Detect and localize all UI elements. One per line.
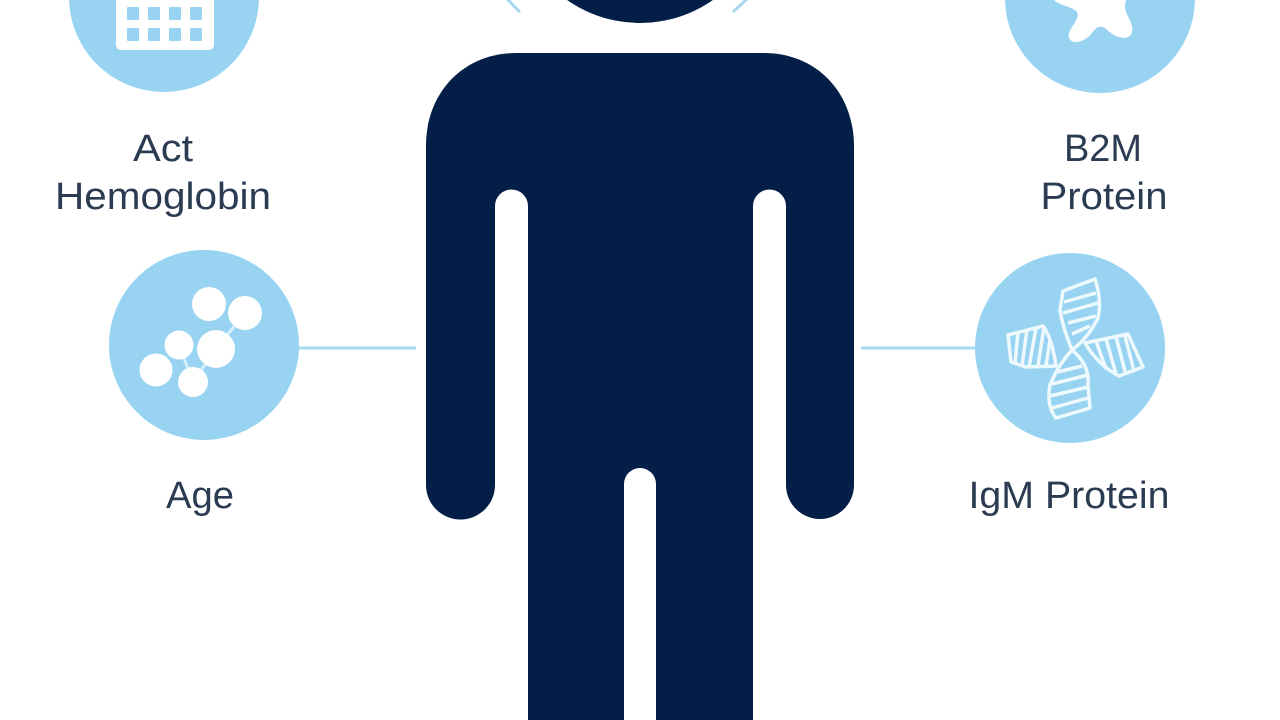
panel: Age <box>109 250 299 517</box>
label: B2M Protein <box>1040 128 1168 218</box>
connector lines <box>298 0 976 348</box>
icon: protein blob <box>1005 0 1195 93</box>
icon: molecule <box>109 250 299 440</box>
figure body <box>426 53 854 720</box>
panel: Act Hemoglobin <box>55 0 271 218</box>
label: B2M Protein: B2M <box>1064 128 1142 170</box>
label: Act Hemoglobin: Act <box>133 128 193 170</box>
panel: IgM Protein <box>968 253 1170 517</box>
label: B2M Protein: Protein <box>1040 176 1168 218</box>
label: Age: Age <box>166 475 234 517</box>
human figure <box>426 0 854 720</box>
icon: calendar grid <box>69 0 259 92</box>
icon: DNA strands <box>975 253 1165 443</box>
label: IgM Protein: IgM Protein <box>968 475 1170 517</box>
figure head <box>513 0 767 23</box>
label: Act Hemoglobin <box>55 128 271 218</box>
label: Act Hemoglobin: Hemoglobin <box>55 176 271 218</box>
panel: B2M Protein <box>1005 0 1195 218</box>
